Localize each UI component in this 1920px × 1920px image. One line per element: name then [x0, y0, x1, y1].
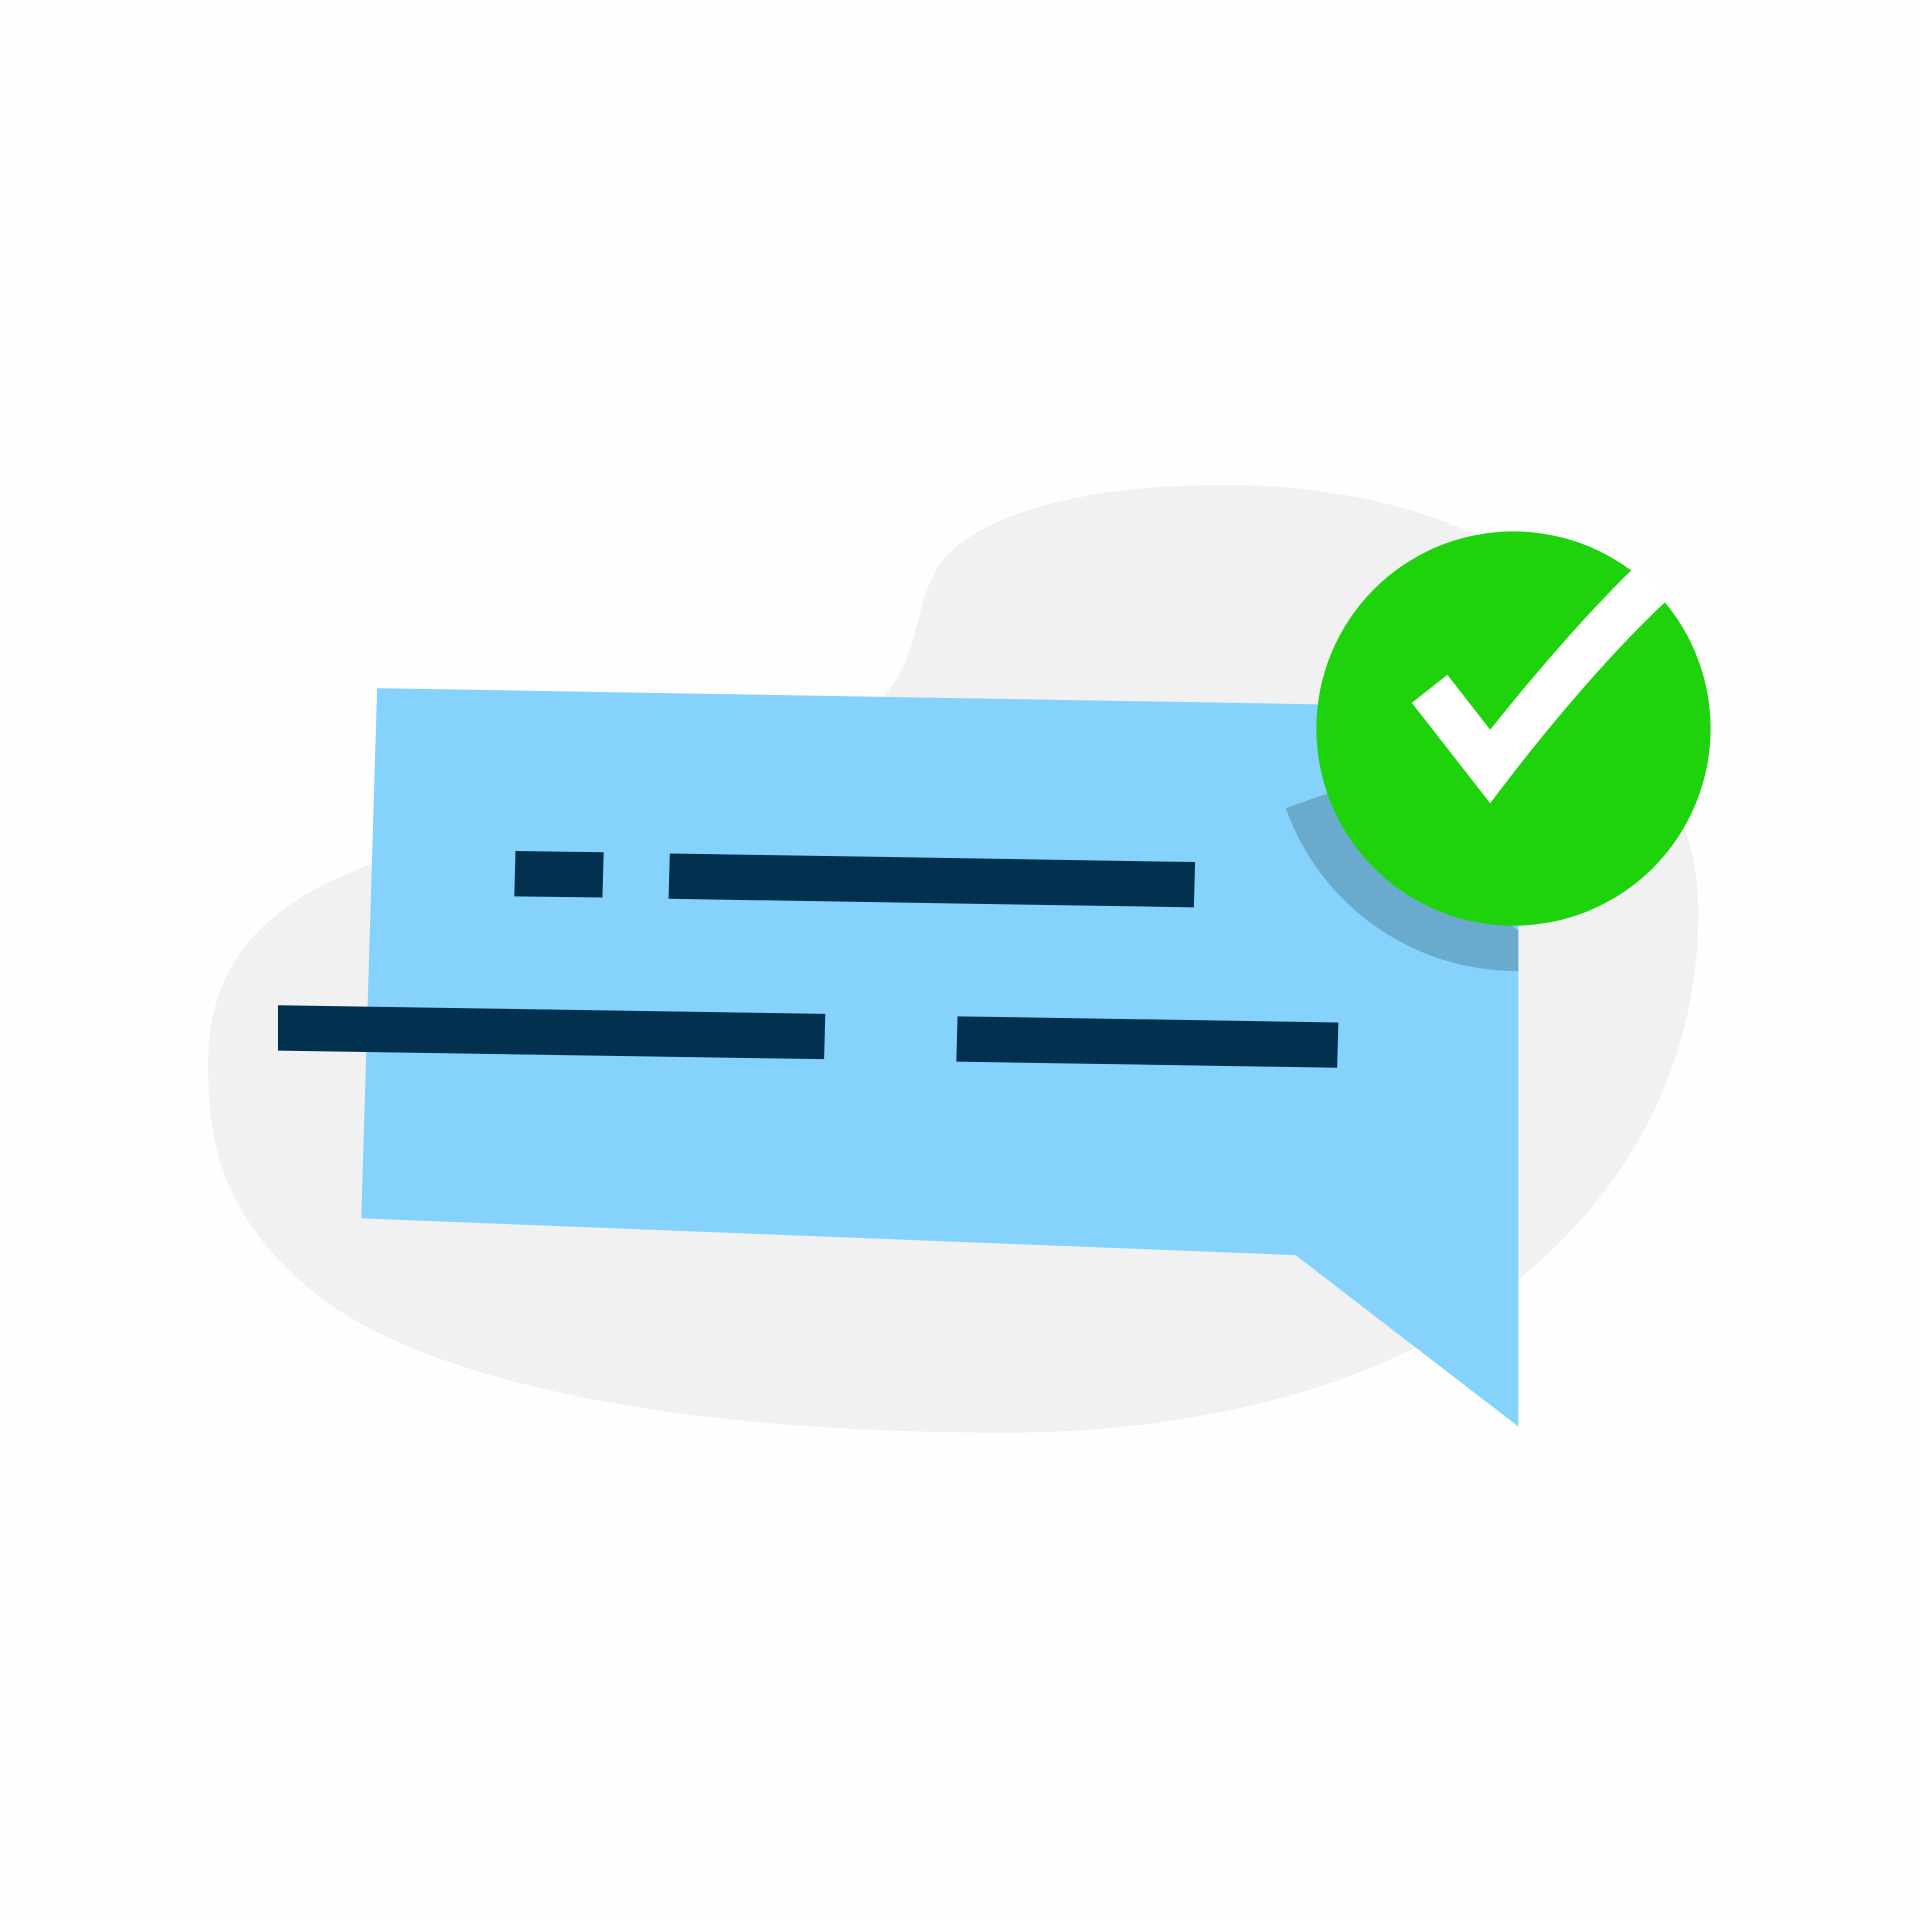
- background blob: [208, 485, 1698, 1433]
- bubble shadow arc: [1286, 791, 1518, 971]
- speech bubble: [361, 688, 1518, 1427]
- text lines: [278, 851, 1338, 1068]
- icon: green check circle: [1316, 531, 1711, 926]
